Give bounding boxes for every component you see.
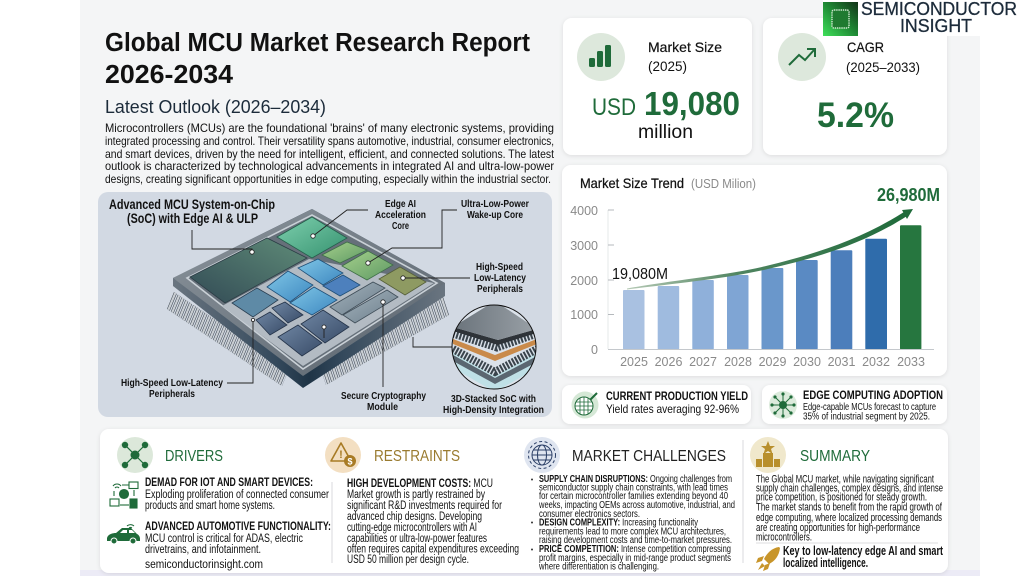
card: edge computing adoption: EDGE COMPUTING ADOPTION [803,388,943,402]
panel: bottom insights [100,429,948,573]
y axis: 0 [591,343,598,357]
card: edge computing adoption: 35% of industrial segment by 2025. [803,412,930,422]
icon: chip logo [823,2,858,36]
callout: localized intelligence. [783,556,868,570]
challenges bullet list: semiconductor supply chain constraints, with lead times [539,482,728,494]
icon: globe [524,437,560,473]
chart heading: (USD Milion) [691,177,756,191]
icon: bar chart [577,33,625,81]
icon: warning with dollar [325,437,361,473]
restraints text: HIGH DEVELOPMENT COSTS: MCU [347,478,493,490]
card: market size: Market Size [648,39,722,55]
diagram labels: Module [367,401,398,413]
x axis labels: 2032 [862,355,890,369]
icon: warning with dollar: $ [347,456,353,466]
diagram labels [121,198,544,416]
y axis: 2000 [570,274,598,288]
x axis labels: 2031 [828,355,855,369]
x axis labels: 2028 [724,355,752,369]
card: CAGR: CAGR [847,39,884,55]
driver text: products and smart home systems. [145,500,275,512]
logo: INSIGHT [900,15,972,36]
driver text: DEMAD FOR IOT AND SMART DEVICES: [145,477,313,489]
summary text [756,474,943,544]
diagram labels: Core [392,220,409,232]
value: million [638,121,693,143]
diagram labels: High-Speed Low-Latency [121,377,223,389]
intro paragraph: integrated processing and control. Their versatility spans automotive, industrial, consumer electronics, [105,134,554,148]
section: summary: SUMMARY [800,448,870,465]
challenges bullet list: for certain microcontroller families extending beyond 40 [539,491,728,502]
summary text: edge computing, where localized processing demands [756,512,942,524]
icon: connected car [107,525,140,544]
intro paragraph: Microcontrollers (MCUs) are the foundational 'brains' of many electronic systems, providing [105,121,554,135]
intro paragraph: designs, creating significant opportunities in edge computing, especially within the industrial sector. [105,172,551,186]
x axis labels: 2025 [620,355,648,369]
value: 19,080 [644,85,740,122]
chart heading: Market Size Trend [580,175,684,191]
driver text: drivetrains, and infotainment. [145,544,261,556]
diagram heading [109,197,275,226]
restraints text: advanced chip designs. Developing [347,511,482,523]
driver text: ADVANCED AUTOMOTIVE FUNCTIONALITY: [145,521,331,533]
diagram labels: Acceleration [375,209,426,221]
challenges bullet list: raising development costs and time-to-market pressures. [539,535,732,546]
icon: warning with dollar: ! [339,449,343,461]
summary text: supply chain challenges, complex designs, and intense [756,482,943,494]
icon: IoT devices [110,482,138,508]
section: summary [750,437,944,571]
summary text: are creating opportunities for high-performance [756,522,920,534]
driver text: Exploding proliferation of connected consumer [145,489,329,501]
title: 2026-2034 [105,61,234,89]
restraints text [347,478,519,566]
summary text: The market stands to benefit from the rapid growth of [756,502,943,514]
card: CAGR [763,18,947,155]
summary text: price competition, is positioned for steady growth. [756,492,927,504]
chart heading [580,175,756,191]
challenges bullet list: profit margins, especially in mid-range product segments [539,553,731,564]
panel: market size trend chart: 19,080M [612,266,668,283]
summary text: The Global MCU market, while navigating significant [756,474,934,486]
callout [783,544,944,570]
trend arrow [627,209,913,290]
diagram heading: (SoC) with Edge AI & ULP [127,211,258,226]
card: CAGR: 5.2% [817,96,894,135]
y axis [570,204,614,357]
x axis labels: 2027 [689,355,717,369]
icon: rocket [756,547,780,571]
intro paragraph: outlook is characterized by technological advancements in integrated AI and ultra-low-power [105,159,554,173]
diagram labels: Secure Cryptography [341,390,426,402]
chip pins [170,300,446,378]
icon: wafer [572,392,598,418]
driver text: semiconductorinsight.com [145,559,263,571]
restraints text: Market growth is partly restrained by [347,489,485,501]
challenges bullet list [531,474,735,572]
title: Global MCU Market Research Report [105,29,530,57]
icon: star and buildings [750,437,786,473]
x axis labels: 2026 [655,355,682,369]
diagram labels: Peripherals [477,283,523,295]
section: restraints [325,437,519,566]
section: drivers [107,437,331,571]
leader lines [192,210,470,387]
card: CAGR: (2025–2033) [846,60,920,75]
card: current production yield: CURRENT PRODUCTION YIELD [606,389,748,403]
bars [623,225,921,350]
diagram labels: 3D-Stacked SoC with [451,393,536,405]
value [592,85,740,143]
panel: market size trend chart [562,165,947,376]
section: market challenges [524,437,735,572]
diagram heading: Advanced MCU System-on-Chip [109,197,275,212]
restraints text: cutting-edge microcontrollers with AI [347,522,477,534]
summary text: microcontrollers. [756,532,812,544]
chip body [173,209,445,388]
diagram labels: Wake-up Core [467,209,523,221]
section: restraints: RESTRAINTS [374,448,460,465]
y axis: 4000 [570,204,598,218]
callout: Key to low-latency edge AI and smart [783,544,944,558]
card: edge computing adoption: Edge-capable MCUs forecast to capture [803,402,936,413]
diagram labels: Edge AI [385,198,416,210]
icon: edge network [769,391,797,419]
title [105,29,530,89]
section: drivers: DRIVERS [165,448,223,465]
diagram labels: Peripherals [149,388,195,400]
diagram labels: High-Density Integration [443,404,544,416]
diagram labels: Low-Latency [474,272,526,284]
card: edge computing adoption [762,385,947,424]
card: market size [563,18,752,155]
card: market size: (2025) [648,59,687,74]
intro paragraph: and smart devices, driven by the need for intelligent, efficient, and connected solutions. The latest [105,147,555,161]
y axis: 3000 [570,239,598,253]
panel: market size trend chart: 26,980M [877,185,940,205]
x axis labels: 2033 [897,355,925,369]
x axis labels: 2029 [759,355,786,369]
challenges bullet list: requirements lead to more complex MCU architectures, [539,526,726,538]
challenges bullet list: consumer electronics sectors. [539,509,640,520]
leader dots [250,234,405,329]
diagram labels: Ultra-Low-Power [461,198,529,210]
subtitle: Latest Outlook (2026–2034) [105,97,326,117]
restraints text: capabilities or ultra-low-power features [347,533,487,545]
section: market challenges: MARKET CHALLENGES [572,448,726,465]
restraints text: often requires capital expenditures exceeding [347,544,519,556]
driver text: MCU control is critical for ADAS, electric [145,533,303,545]
card: current production yield [562,385,751,424]
restraints text: significant R&D investments required for [347,500,502,512]
diagram labels: High-Speed [476,261,523,273]
card: current production yield: Yield rates averaging 92-96% [606,402,739,416]
restraints text: USD 50 million per design cycle. [347,554,469,566]
challenges bullet list: where differentiation is challenging. [538,562,659,572]
panel: MCU SoC diagram [98,192,552,417]
challenges bullet list: weeks, impacting OEMs across automotive, industrial, and [538,500,735,511]
challenges bullet list: PRICE COMPETITION: Intense competition compressing [539,544,731,555]
intro paragraph [105,121,555,186]
y axis: 1000 [570,308,598,322]
icon: trend arrow [778,33,826,81]
x axis labels: 2030 [793,355,821,369]
challenges bullet list: SUPPLY CHAIN DISRUPTIONS: Ongoing challenges from [539,474,732,485]
logo [823,0,1024,36]
challenges bullet list: DESIGN COMPLEXITY: Increasing functionality [539,518,698,528]
value: USD [592,94,636,121]
x axis labels [620,355,925,369]
inset: 3D stacked SoC [452,304,536,390]
driver text [145,477,331,571]
icon: drivers network [117,437,153,473]
